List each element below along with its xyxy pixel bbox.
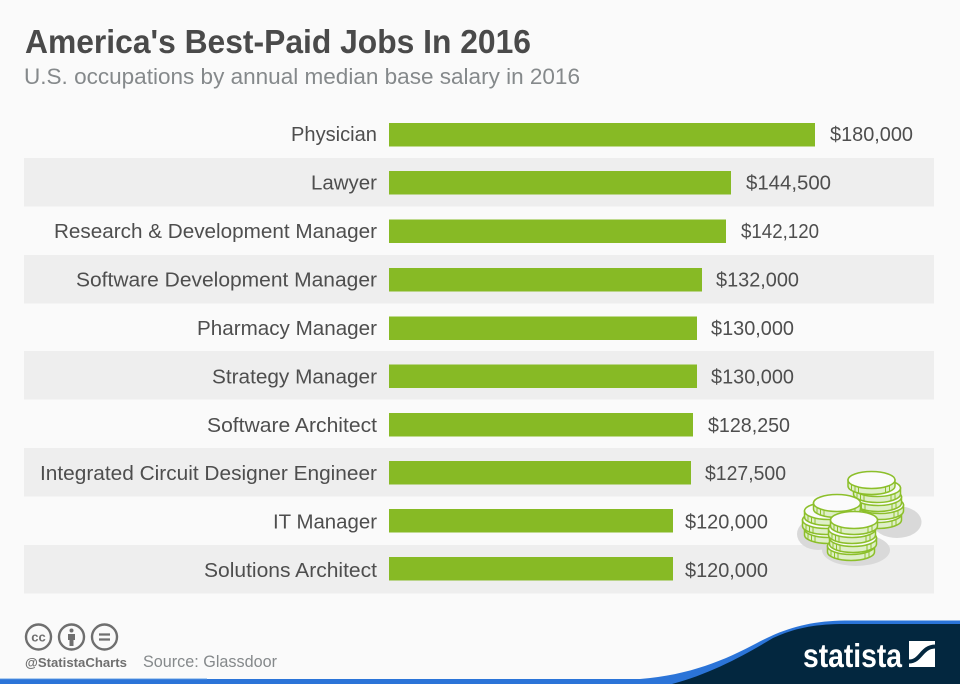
row: Solutions Architect: [204, 557, 768, 582]
row: Lawyer: $144,500: [746, 172, 831, 194]
icon: coins: [797, 472, 922, 566]
row: Research & Development Manager: $142,120: [741, 220, 819, 243]
icon: attribution: [59, 624, 84, 650]
statista logo: statista: [803, 637, 903, 674]
row: Solutions Architect: Solutions Architect: [204, 559, 377, 582]
row: Software Architect: $128,250: [708, 414, 790, 437]
row: Physician: $180,000: [830, 123, 913, 146]
row: Pharmacy Manager: Pharmacy Manager: [197, 317, 377, 340]
row: Software Architect: Software Architect: [207, 414, 377, 437]
row: Integrated Circuit Designer Engineer: [40, 461, 786, 485]
row: Pharmacy Manager: $130,000: [711, 317, 794, 340]
row: Strategy Manager: $130,000: [711, 366, 794, 388]
row: Integrated Circuit Designer Engineer: Integrated Circuit Designer Engineer: [40, 462, 377, 485]
row: Physician: [291, 123, 913, 146]
row: Software Architect: [207, 413, 790, 437]
row: Physician: Physician: [291, 123, 377, 146]
row: Strategy Manager: Strategy Manager: [212, 366, 377, 388]
row: Software Development Manager: [76, 268, 799, 292]
row: Integrated Circuit Designer Engineer: $127,500: [705, 462, 786, 485]
row: Pharmacy Manager: [197, 316, 794, 340]
title: America's Best-Paid Jobs In 2016: [25, 23, 531, 60]
row: Lawyer: Lawyer: [311, 172, 377, 194]
icon: no derivatives: [92, 624, 117, 650]
row: Software Development Manager: Software Development Manager: [76, 268, 377, 292]
row: IT Manager: IT Manager: [273, 510, 377, 534]
row: Research & Development Manager: Research & Development Manager: [54, 220, 377, 243]
row: Lawyer: [311, 171, 831, 194]
source: Source: Glassdoor: [143, 653, 277, 671]
row: Software Development Manager: $132,000: [716, 268, 799, 292]
icon: statista mark: [909, 641, 935, 667]
icon: cc: cc: [31, 630, 46, 644]
icon: licence badges: [26, 624, 117, 650]
row backgrounds: [24, 158, 934, 594]
handle: @StatistaCharts: [25, 656, 127, 670]
row: Strategy Manager: [212, 364, 794, 388]
row: IT Manager: $120,000: [685, 510, 768, 534]
row: Solutions Architect: $120,000: [685, 559, 768, 582]
subtitle: U.S. occupations by annual median base salary in 2016: [24, 64, 580, 89]
row: IT Manager: [273, 509, 768, 534]
bar chart: [40, 123, 913, 582]
footer band: [0, 620, 960, 684]
row: Research & Development Manager: [54, 220, 819, 243]
